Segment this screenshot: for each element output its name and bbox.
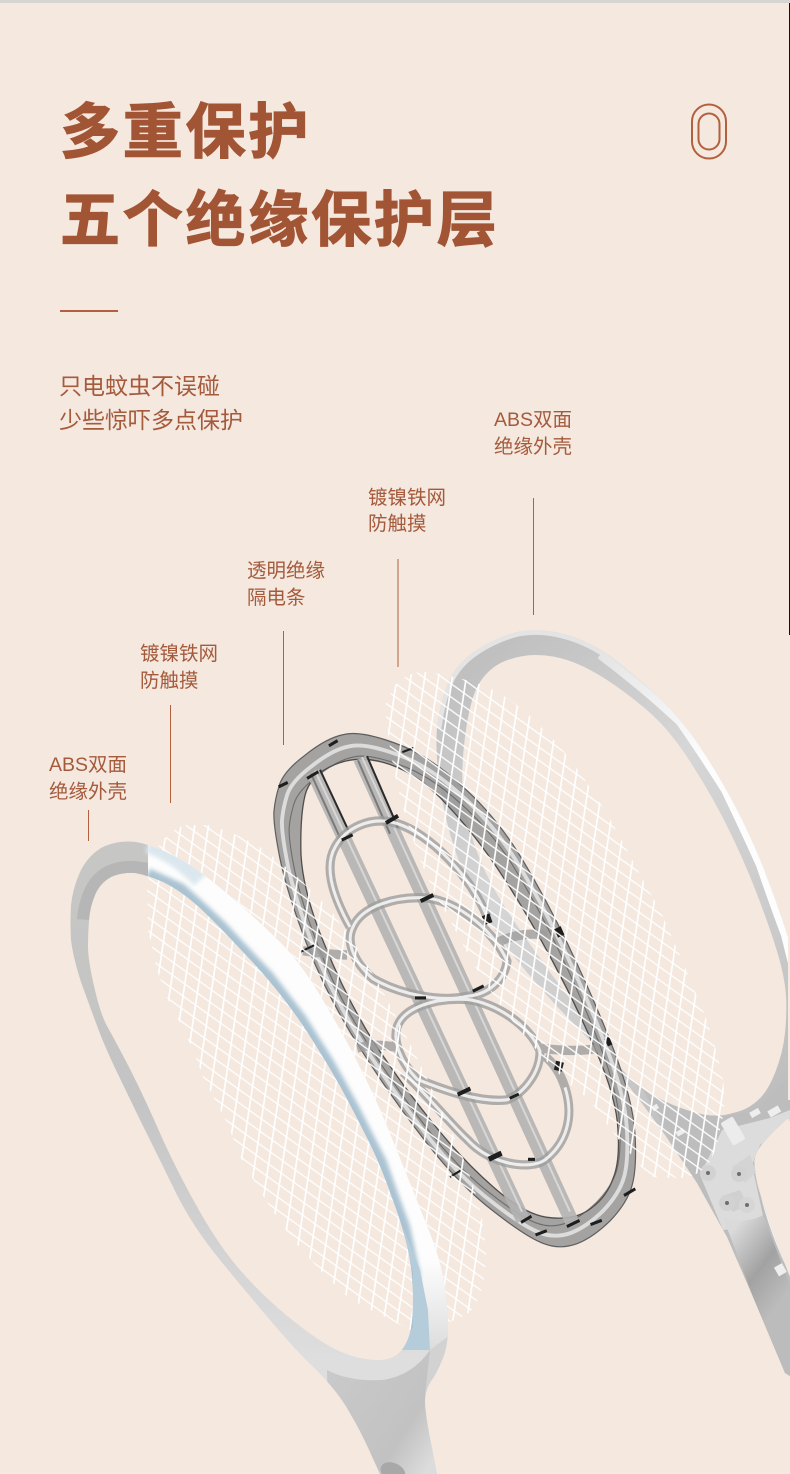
rear racket shell [420, 620, 790, 1400]
label: front shell [49, 754, 127, 841]
front racket shell [60, 830, 470, 1474]
grey section inner shade [89, 873, 148, 920]
mesh layers [147, 672, 724, 1330]
middle insulating frame [274, 733, 636, 1247]
outer oval track [274, 733, 636, 1247]
handle [327, 1350, 446, 1474]
handle screw posts [651, 1104, 787, 1276]
blue inner shadow [147, 875, 413, 1350]
loop highlights [330, 821, 569, 1165]
title: 多重保护 [60, 99, 311, 166]
rear metal mesh [385, 672, 724, 1178]
rear ring outer lip [437, 630, 654, 728]
handle light panel [700, 1110, 790, 1230]
right edge line [789, 3, 790, 635]
handle edge strip [758, 1160, 790, 1268]
title [60, 99, 500, 254]
label: rear mesh [368, 487, 446, 667]
rear ring white strip [600, 655, 790, 975]
label: front mesh: 镀镍铁网 [140, 643, 218, 665]
blue lower panel [400, 1227, 430, 1350]
description text [59, 373, 243, 433]
label: front shell: 绝缘外壳 [49, 781, 127, 803]
divider [60, 310, 118, 312]
label: front shell: ABS双面 [49, 754, 127, 776]
label: insulating strip [247, 560, 325, 745]
grip opening [380, 1462, 406, 1474]
black clips [278, 739, 636, 1236]
handle grip shade [723, 1215, 790, 1376]
handle neck [642, 1089, 790, 1226]
title: 五个绝缘保护层 [60, 187, 500, 254]
label: insulating strip: 隔电条 [247, 587, 306, 609]
front metal mesh [147, 825, 486, 1330]
top strip [0, 0, 790, 3]
label: front mesh: 防触摸 [140, 670, 199, 692]
parallel bars [311, 756, 573, 1224]
description text: 少些惊吓多点保护 [59, 407, 243, 433]
white section [148, 845, 448, 1332]
pale blue near seam [148, 845, 200, 880]
label: rear shell: ABS双面 [494, 409, 572, 431]
rear ring [420, 620, 790, 1400]
label: rear shell [494, 409, 572, 615]
label: rear mesh: 防触摸 [368, 513, 427, 535]
front ring base [70, 842, 448, 1382]
label: front mesh [140, 643, 218, 803]
description text: 只电蚊虫不误碰 [59, 373, 220, 399]
label: rear shell: 绝缘外壳 [494, 436, 572, 458]
label: insulating strip: 透明绝缘 [247, 560, 325, 582]
inner loops [303, 821, 600, 1165]
icon: pill outline [692, 104, 726, 158]
label: rear mesh: 镀镍铁网 [368, 487, 446, 509]
lower right shade [425, 1337, 448, 1395]
